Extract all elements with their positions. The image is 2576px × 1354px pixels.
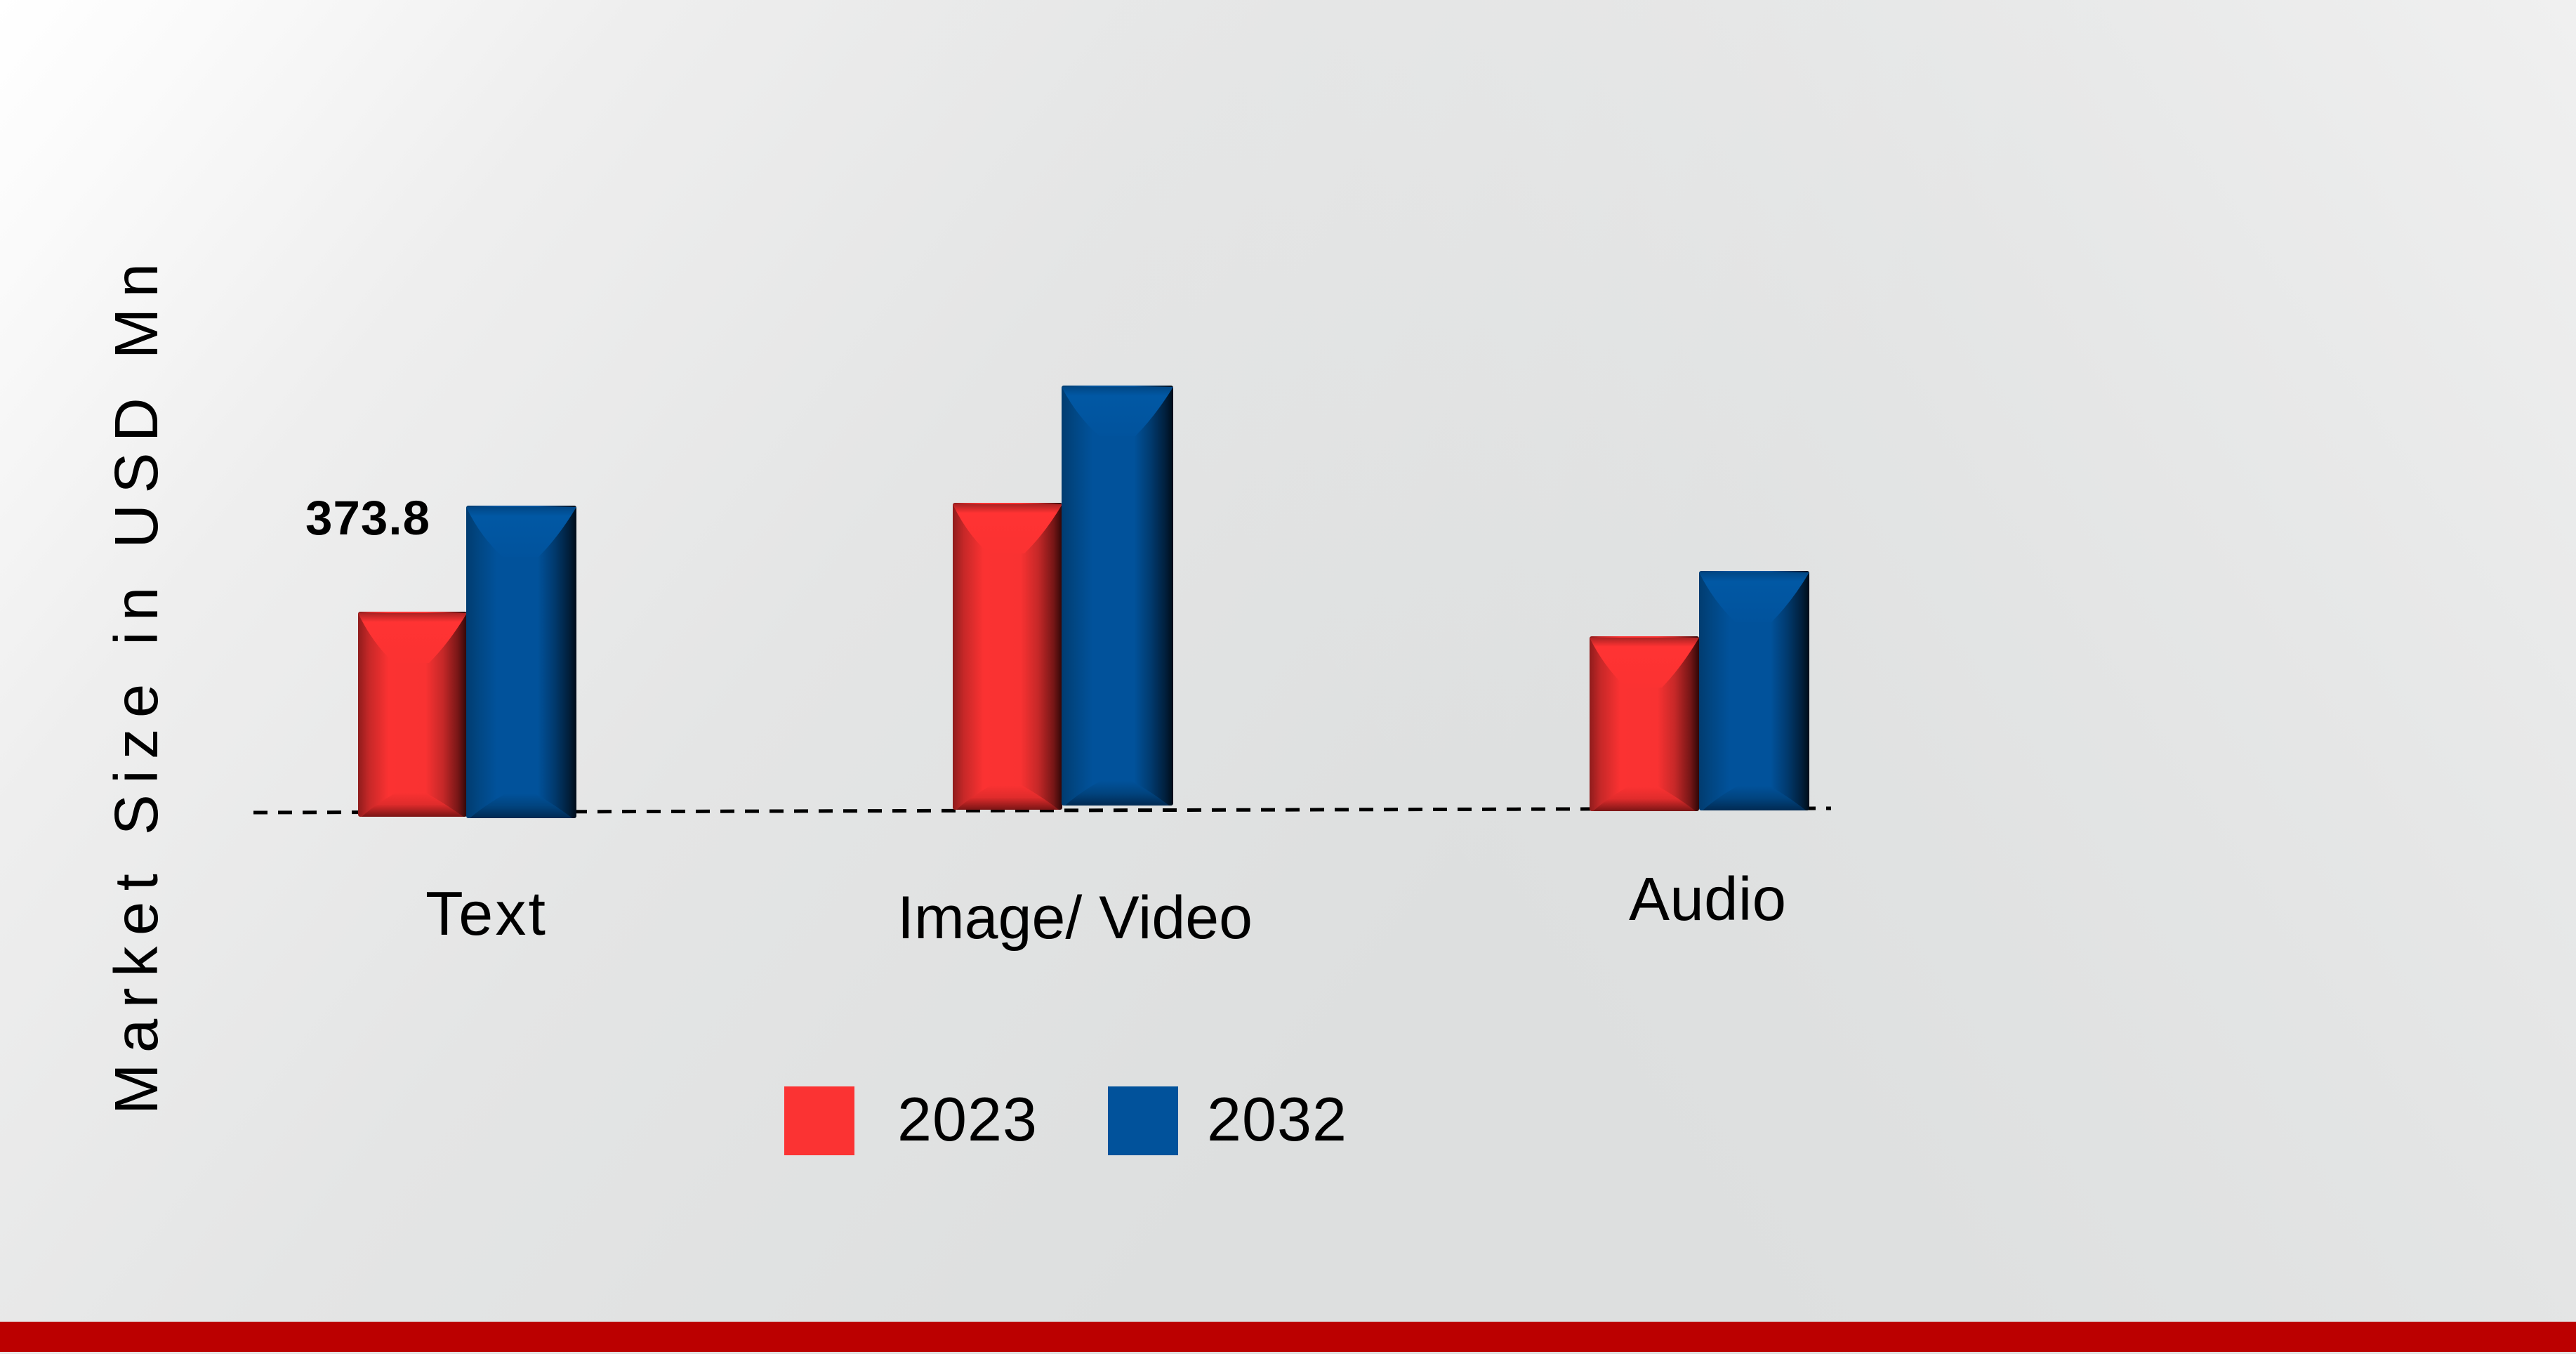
legend label: 2032: 2032 [1207, 1084, 1347, 1154]
legend swatch: 2023 [784, 1086, 854, 1155]
footer bar [0, 1322, 2576, 1352]
bar group: Image/ Video [953, 386, 1173, 810]
legend label: 2023: 2023 [897, 1084, 1037, 1154]
bar group: Audio [1590, 571, 1809, 811]
bar group: Text [305, 491, 576, 818]
bar: Image/ Video 2032 [1062, 386, 1173, 806]
category label: Audio: Audio [1629, 865, 1786, 933]
bar: Audio 2023 [1590, 636, 1699, 811]
dashed baseline [253, 808, 1831, 813]
bar: Image/ Video 2023 [953, 503, 1062, 810]
category label: Text: Text [425, 879, 546, 948]
bar: Audio 2032 [1699, 571, 1809, 810]
category label: Image/ Video: Image/ Video [897, 884, 1253, 952]
value label: 373.8: 373.8 [305, 491, 430, 545]
bar: Text 2023 [358, 612, 467, 817]
legend [784, 1084, 1347, 1155]
legend swatch: 2032 [1108, 1086, 1178, 1155]
bar: Text 2032 [466, 506, 576, 818]
axis title: Market Size in USD Mn: Market Size in USD Mn [103, 263, 171, 1115]
